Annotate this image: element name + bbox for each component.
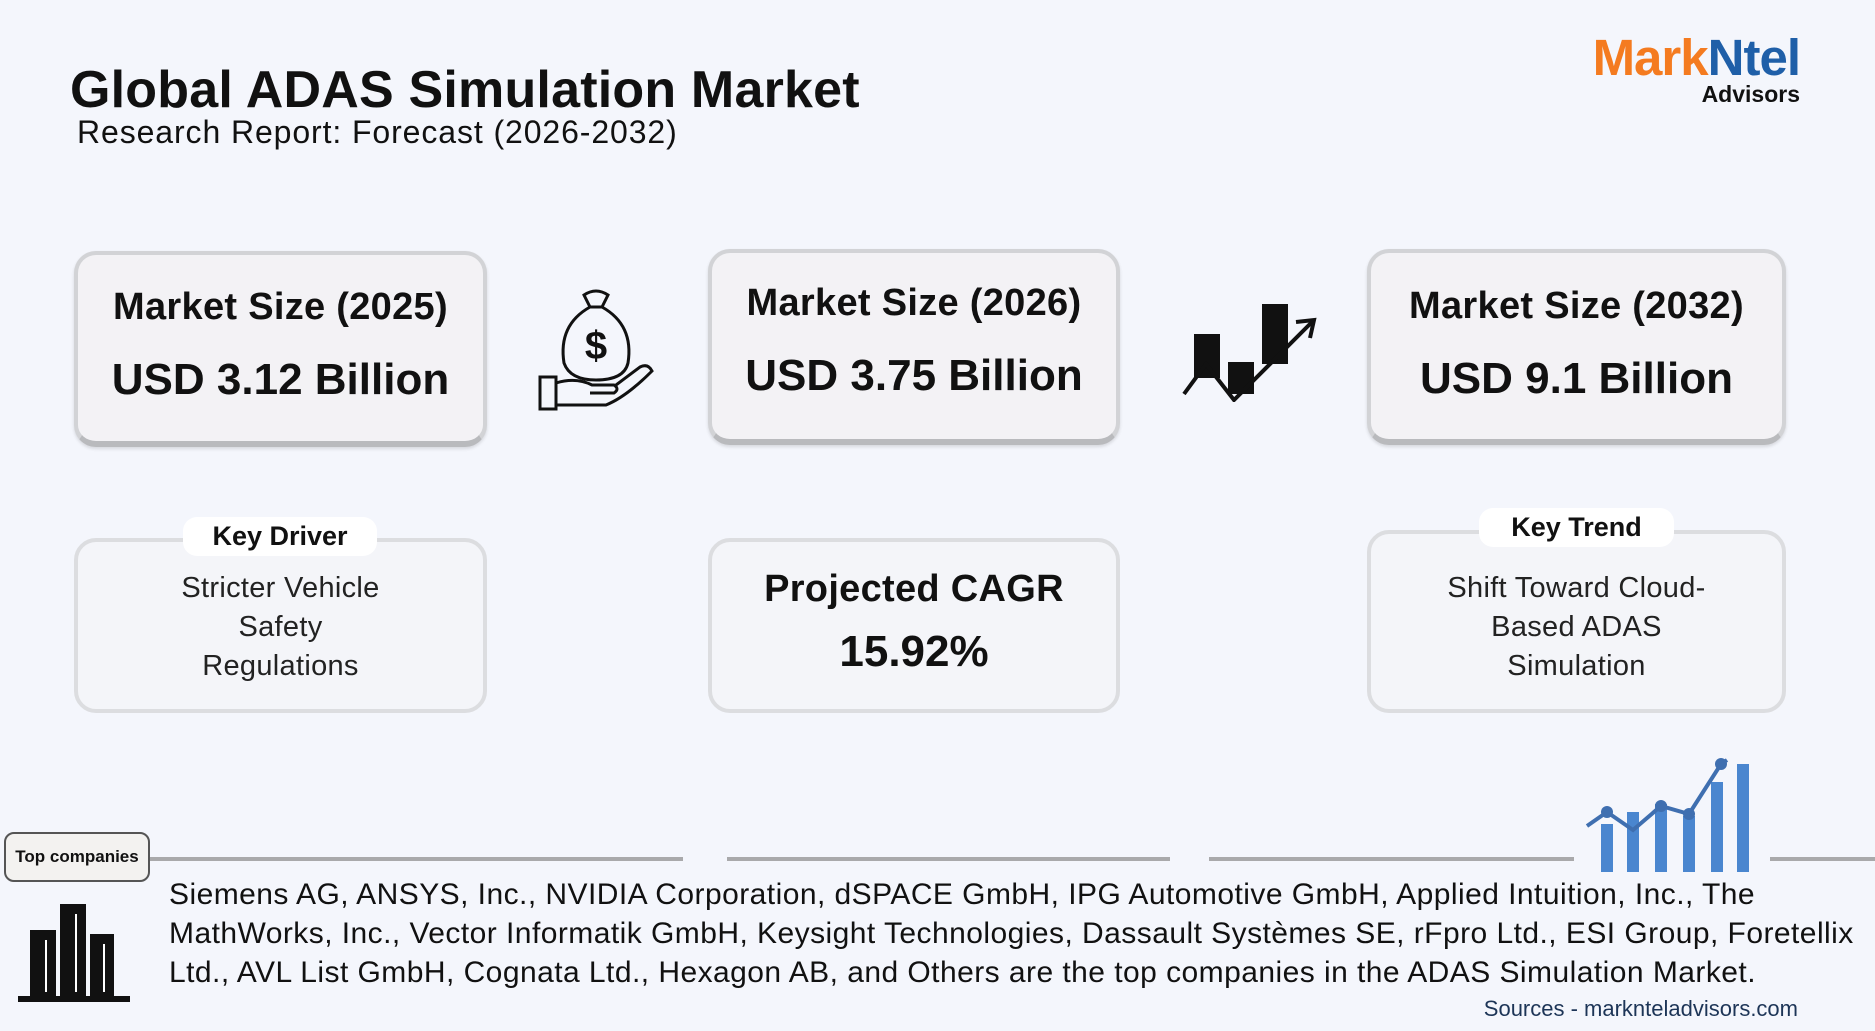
card: market size 2026: Market Size (2026) bbox=[747, 282, 1081, 324]
card: market size 2025: Market Size (2025) bbox=[113, 286, 448, 328]
panel: key trend bbox=[1367, 530, 1786, 713]
panel: projected CAGR: Projected CAGR bbox=[764, 568, 1064, 610]
badge: key driver bbox=[183, 517, 377, 556]
badge: key trend: Key Trend bbox=[1511, 512, 1642, 542]
badge: key driver: Key Driver bbox=[212, 521, 348, 551]
panel: key trend: Shift Toward Cloud- bbox=[1447, 572, 1706, 604]
panel: key trend: Based ADAS bbox=[1491, 611, 1662, 643]
icon: growth chart bbox=[1182, 304, 1316, 402]
text: company list: Ltd., AVL List GmbH, Cognata Ltd., Hexagon AB, and Others are the top companies in the ADAS Simulation Market. bbox=[169, 956, 1756, 989]
card: market size 2032: Market Size (2032) bbox=[1409, 285, 1744, 327]
card: market size 2026: USD 3.75 Billion bbox=[745, 351, 1083, 400]
panel: projected CAGR: 15.92% bbox=[839, 627, 989, 676]
logo: Advisors bbox=[1702, 81, 1800, 107]
subtitle: Research Report: Forecast (2026-2032) bbox=[77, 114, 678, 150]
logo: MarkNtel bbox=[1593, 29, 1800, 86]
panel: key trend: Simulation bbox=[1507, 650, 1646, 682]
icon: money bag in hand: $ bbox=[585, 324, 607, 368]
panel: key driver bbox=[74, 538, 487, 713]
label: top companies: Top companies bbox=[15, 847, 139, 866]
icon: bar chart bbox=[1586, 758, 1749, 872]
panel: projected CAGR bbox=[708, 538, 1120, 713]
panel: key driver: Regulations bbox=[202, 650, 359, 682]
panel: key driver: Safety bbox=[238, 611, 322, 643]
label: top companies bbox=[4, 832, 150, 882]
panel: key driver: Stricter Vehicle bbox=[181, 572, 380, 604]
sources: Sources - marknteladvisors.com bbox=[1484, 996, 1798, 1021]
text: company list: Siemens AG, ANSYS, Inc., NVIDIA Corporation, dSPACE GmbH, IPG Automotive GmbH, Applied Intuition, Inc., The bbox=[169, 878, 1755, 911]
card: market size 2032: USD 9.1 Billion bbox=[1420, 354, 1733, 403]
icon: buildings bbox=[18, 904, 130, 1002]
icon: money bag in hand bbox=[538, 290, 654, 410]
card: market size 2026 bbox=[708, 249, 1120, 445]
text: company list: MathWorks, Inc., Vector Informatik GmbH, Keysight Technologies, Dassault Systèmes SE, rFpro Ltd., ESI Group, Foretellix bbox=[169, 917, 1854, 950]
card: market size 2025: USD 3.12 Billion bbox=[112, 355, 449, 404]
card: market size 2032 bbox=[1367, 249, 1786, 445]
card: market size 2025 bbox=[74, 251, 487, 447]
text: company list bbox=[169, 878, 1854, 989]
title: Global ADAS Simulation Market bbox=[70, 61, 860, 119]
badge: key trend bbox=[1479, 508, 1674, 547]
